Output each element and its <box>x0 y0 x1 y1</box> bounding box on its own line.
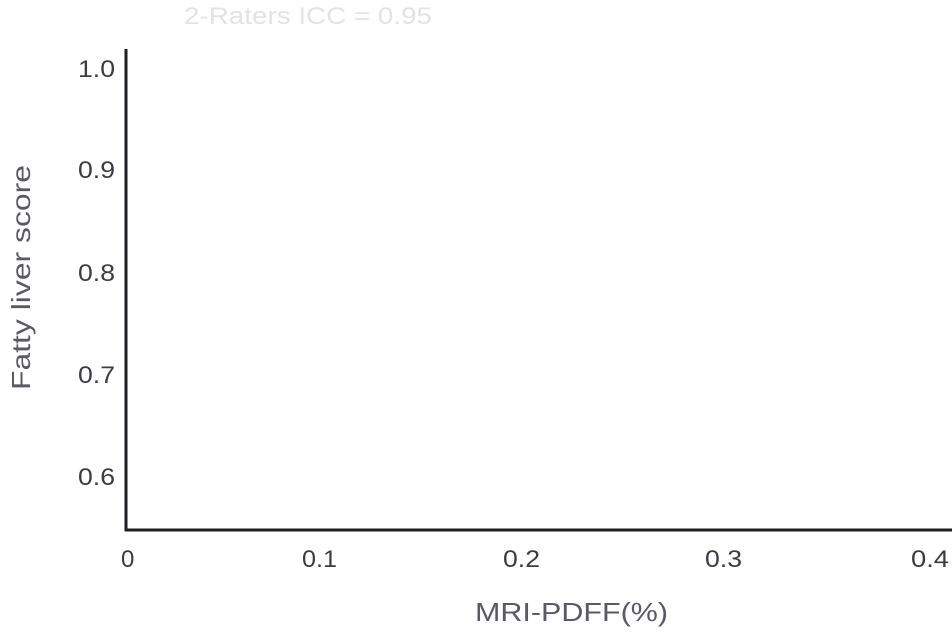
x axis <box>121 530 952 573</box>
y axis title: Fatty liver score <box>6 165 36 390</box>
y tick labels: 0.6 <box>78 464 115 491</box>
title: 2-Raters ICC = 0.95 <box>184 3 432 30</box>
y tick labels: 0.7 <box>78 362 115 389</box>
y tick labels <box>78 56 115 491</box>
y tick labels: 0.8 <box>78 260 115 287</box>
x tick labels: 0 <box>121 546 134 573</box>
y tick labels: 1.0 <box>78 56 115 83</box>
x tick labels: 0.4 <box>911 546 949 573</box>
x axis title: MRI-PDFF(%) <box>475 597 668 627</box>
x tick labels: 0.3 <box>705 546 742 573</box>
y tick labels: 0.9 <box>78 157 115 184</box>
y axis <box>78 49 126 531</box>
x tick labels: 0.1 <box>302 546 337 573</box>
x tick labels: 0.2 <box>503 546 540 573</box>
x tick labels <box>121 546 949 573</box>
